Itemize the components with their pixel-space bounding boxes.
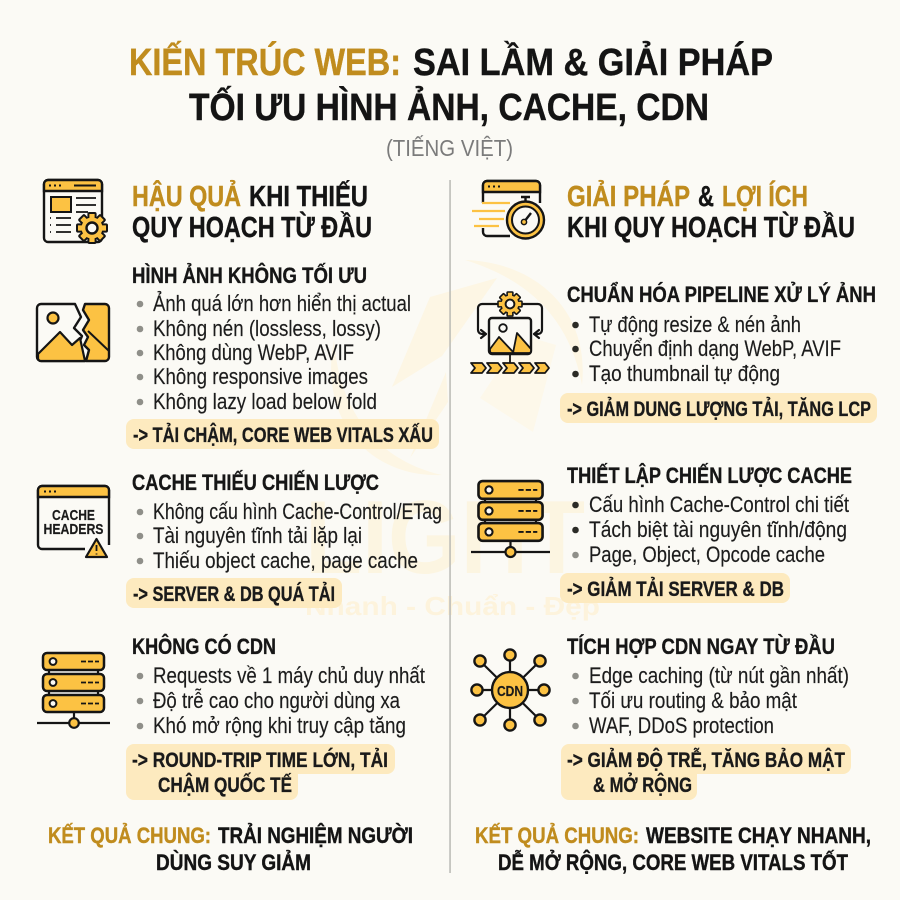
- result: right: KẾT QUẢ CHUNG:: [475, 823, 639, 848]
- result: right: DỄ MỞ RỘNG, CORE WEB VITALS TỐT: [498, 849, 848, 875]
- watermark logo: [305, 260, 600, 621]
- section: no CDN: -> ROUND-TRIP TIME LỚN, TẢI: [132, 747, 388, 772]
- section: cache strategy: Tách biệt tài nguyên tĩnh/động: [589, 517, 847, 542]
- section: image pipeline: [560, 282, 877, 423]
- section: unoptimized images: [126, 262, 439, 449]
- section: cache without strategy: Không cấu hình Cache-Control/ETag: [153, 499, 442, 524]
- icon: fast page with stopwatch: [472, 181, 544, 238]
- section: unoptimized images: HÌNH ẢNH KHÔNG TỐI ƯU: [132, 262, 367, 288]
- section: image pipeline: Tạo thumbnail tự động: [589, 361, 780, 386]
- heading: solutions: GIẢI PHÁP: [567, 179, 690, 213]
- icon: cache headers warning: CACHE: [52, 507, 95, 524]
- section: unoptimized images: Không nén (lossless, lossy): [153, 316, 381, 341]
- section: CDN integration: Tối ưu routing & bảo mật: [589, 688, 797, 713]
- section: no CDN: Khó mở rộng khi truy cập tăng: [153, 713, 406, 738]
- result: right: [475, 823, 871, 875]
- result: right: WEBSITE CHẠY NHANH,: [646, 823, 871, 848]
- watermark logo: LIGHT: [305, 480, 585, 596]
- divider: [449, 180, 451, 873]
- section: no CDN: KHÔNG CÓ CDN: [132, 634, 276, 659]
- heading: consequences: [132, 179, 372, 244]
- section: cache without strategy: CACHE THIẾU CHIẾN LƯỢC: [132, 470, 379, 495]
- icon: single server: [37, 653, 110, 728]
- section: CDN integration: [561, 634, 851, 800]
- icon: cache headers warning: HEADERS: [44, 521, 104, 538]
- section: cache strategy: -> GIẢM TẢI SERVER & DB: [567, 576, 784, 601]
- section: CDN integration: TÍCH HỢP CDN NGAY TỪ ĐẦU: [567, 634, 835, 659]
- section: no CDN: Requests về 1 máy chủ duy nhất: [153, 663, 425, 688]
- section: no CDN: [126, 634, 425, 800]
- watermark logo: Nhanh - Chuẩn - Đẹp: [305, 591, 600, 621]
- section: unoptimized images: Không lazy load below fold: [153, 389, 377, 414]
- heading: consequences: QUY HOẠCH TỪ ĐẦU: [132, 210, 372, 244]
- heading: consequences: KHI THIẾU: [249, 179, 368, 213]
- icon: CDN network: [471, 649, 550, 731]
- section: unoptimized images: Ảnh quá lớn hơn hiển thị actual: [153, 291, 411, 316]
- section: CDN integration: WAF, DDoS protection: [589, 713, 774, 738]
- section: cache without strategy: Tài nguyên tĩnh tải lặp lại: [153, 523, 362, 548]
- section: no CDN: Độ trễ cao cho người dùng xa: [153, 688, 401, 713]
- icon: image pipeline: [471, 292, 549, 373]
- section: unoptimized images: Không responsive images: [153, 364, 368, 389]
- result: left: [48, 823, 413, 875]
- icon: web page with gear: [44, 180, 107, 243]
- heading: solutions: LỢI ÍCH: [722, 179, 808, 213]
- title: SAI LẦM & GIẢI PHÁP: [413, 40, 773, 84]
- heading: solutions: [567, 179, 855, 244]
- icon: CDN network: CDN: [497, 683, 523, 700]
- heading: solutions: &: [698, 181, 714, 213]
- section: image pipeline: Chuyển định dạng WebP, AVIF: [589, 336, 841, 361]
- section: unoptimized images: Không dùng WebP, AVIF: [153, 340, 354, 365]
- section: no CDN: CHẬM QUỐC TẾ: [158, 771, 292, 797]
- section: cache without strategy: -> SERVER & DB QUÁ TẢI: [133, 581, 335, 606]
- title: KIẾN TRÚC WEB:: [129, 40, 401, 84]
- section: CDN integration: Edge caching (từ nút gần nhất): [589, 663, 849, 688]
- section: cache strategy: Cấu hình Cache-Control chi tiết: [589, 492, 849, 517]
- section: cache without strategy: Thiếu object cache, page cache: [153, 548, 418, 573]
- result: left: TRẢI NGHIỆM NGƯỜI: [218, 823, 413, 848]
- title: [129, 40, 773, 129]
- result: left: KẾT QUẢ CHUNG:: [48, 823, 211, 848]
- section: cache without strategy: [126, 470, 442, 608]
- title: TỐI ƯU HÌNH ẢNH, CACHE, CDN: [189, 84, 709, 129]
- icon: broken image: [37, 304, 109, 361]
- panel: consequences: [37, 179, 442, 875]
- result: left: DÙNG SUY GIẢM: [156, 850, 311, 875]
- section: unoptimized images: -> TẢI CHẬM, CORE WEB VITALS XẤU: [133, 422, 433, 447]
- section: cache strategy: [560, 463, 852, 603]
- subtitle: (TIẾNG VIỆT): [386, 134, 513, 161]
- section: cache strategy: Page, Object, Opcode cache: [589, 542, 825, 567]
- panel: solutions: [471, 179, 877, 875]
- heading: consequences: HẬU QUẢ: [132, 179, 241, 213]
- section: CDN integration: & MỞ RỘNG: [593, 772, 692, 797]
- icon: cache headers warning: [38, 486, 109, 557]
- section: image pipeline: Tự động resize & nén ảnh: [589, 312, 801, 337]
- icon: cache server: [471, 481, 550, 557]
